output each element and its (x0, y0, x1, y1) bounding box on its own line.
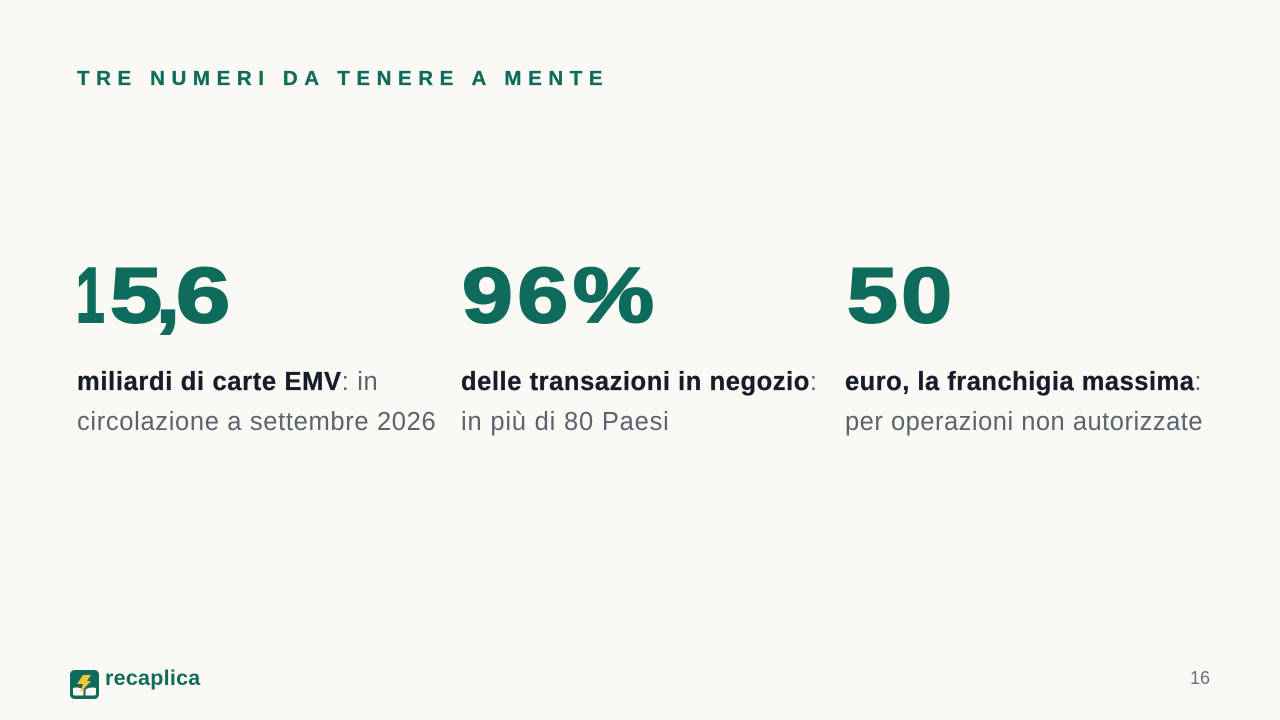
heading: TRE NUMERI DA TENERE A MENTE (77, 67, 609, 90)
stat description: per operazioni non autorizzate (845, 408, 1203, 436)
stat number: 5 (110, 251, 162, 339)
stat number: 6 (176, 251, 230, 339)
page number: 16 (1190, 668, 1210, 688)
stat number: , (156, 251, 180, 339)
brand name: recaplica (105, 666, 200, 690)
stat description (461, 368, 818, 436)
stat description (845, 368, 1203, 436)
stat description: euro, la franchigia massima: (845, 368, 1202, 396)
stat description: delle transazioni in negozio: (461, 368, 818, 396)
stat number: 96% (462, 251, 659, 339)
stat description: circolazione a settembre 2026 (77, 408, 436, 436)
logo (70, 666, 200, 699)
stat description: in più di 80 Paesi (461, 408, 670, 436)
icon: lightning bolt over open book (70, 670, 99, 699)
stat number (76, 251, 230, 339)
stat description: miliardi di carte EMV: in (77, 368, 378, 396)
stat: 96% (461, 251, 818, 436)
stat number: 1 (76, 251, 105, 339)
stat description (77, 368, 436, 436)
stat number: 50 (847, 251, 956, 339)
stat: 15,6 (76, 251, 436, 436)
stat: 50 (845, 251, 1203, 436)
